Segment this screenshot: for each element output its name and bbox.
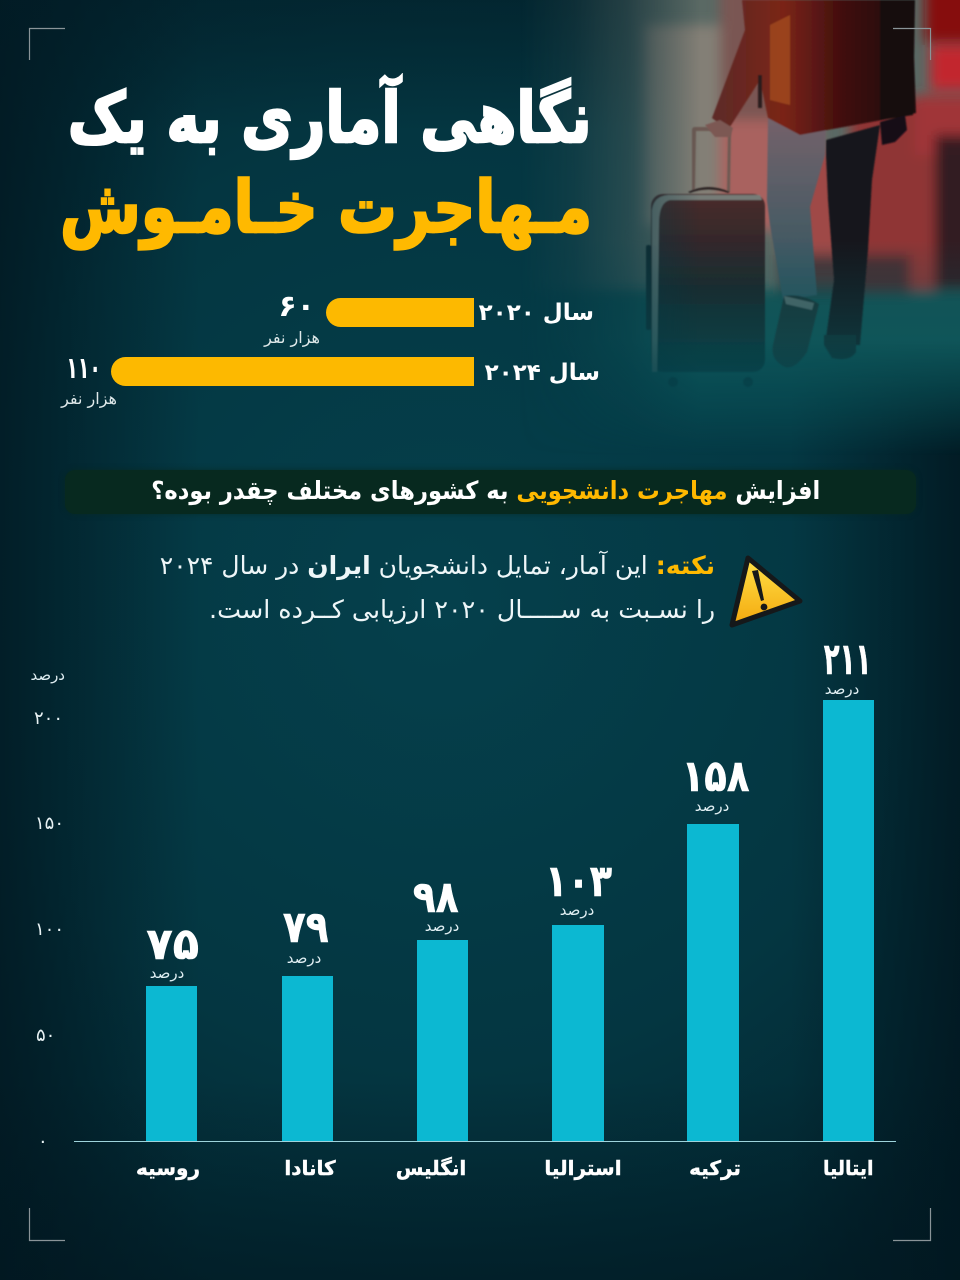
note line 1: نکته: این آمار، تمایل دانشجویان ایران در سال ۲۰۲۴ — [160, 551, 715, 580]
y axis ticks: ۱۰۰ — [35, 919, 64, 940]
country: Turkey: ترکیه — [689, 1156, 741, 1180]
y axis ticks: ۵۰ — [36, 1025, 55, 1046]
bar 2024 — [111, 357, 474, 386]
bar: Italy — [823, 700, 874, 1141]
value 60: ۶۰ — [278, 289, 315, 324]
bar: Canada — [282, 976, 333, 1141]
note line 2: را نسـبت به ســـــال ۲۰۲۰ ارزیابی کــرده است. — [209, 595, 715, 624]
label 2024: سال ۲۰۲۴ — [485, 360, 600, 386]
unit: درصد — [287, 949, 321, 967]
y axis ticks: ۱۵۰ — [35, 813, 64, 834]
unit: درصد — [150, 964, 184, 982]
value 98: ۹۸ — [413, 872, 459, 923]
unit 110: هزار نفر — [61, 389, 117, 408]
axis line — [74, 1141, 896, 1142]
bar chart — [30, 634, 896, 1180]
y axis ticks: ۰ — [38, 1131, 48, 1152]
country: UK: انگلیس — [396, 1156, 466, 1180]
icon: warning triangle — [730, 556, 802, 628]
bar 2020 — [326, 298, 474, 327]
label 2020: سال ۲۰۲۰ — [479, 300, 594, 326]
unit: درصد — [425, 917, 459, 935]
value 158: ۱۵۸ — [682, 751, 750, 802]
suitcase — [646, 127, 765, 387]
country: Russia: روسیه — [136, 1156, 200, 1180]
title: نگاهی آماری به یک — [68, 77, 592, 159]
bar: Russia — [146, 986, 197, 1141]
bar: UK — [417, 940, 468, 1141]
y axis ticks: ۲۰۰ — [34, 708, 63, 729]
y axis unit: درصد — [30, 666, 65, 684]
year comparison bars — [60, 289, 600, 408]
bar: Turkey — [687, 824, 739, 1141]
banner text: افزایش مهاجرت دانشجویی به کشورهای مختلف چقدر بوده؟ — [151, 476, 820, 505]
question banner — [65, 470, 916, 514]
traveler silhouette — [705, 0, 916, 367]
unit: درصد — [560, 901, 594, 919]
value 79: ۷۹ — [283, 902, 329, 953]
country: Italy: ایتالیا — [823, 1156, 873, 1180]
value 75: ۷۵ — [147, 919, 199, 970]
value 103: ۱۰۳ — [546, 856, 612, 907]
country: Australia: استرالیا — [544, 1156, 622, 1180]
unit: درصد — [695, 797, 729, 815]
value 211: ۲۱۱ — [824, 634, 872, 685]
bar: Australia — [552, 925, 604, 1141]
title highlight: مـهاجرت خـامـوش — [60, 165, 592, 249]
value 110: ۱۱۰ — [66, 351, 101, 386]
unit 60: هزار نفر — [264, 328, 320, 347]
country: Canada: کانادا — [284, 1156, 336, 1180]
note text — [160, 550, 715, 624]
unit: درصد — [825, 680, 859, 698]
y axis ticks — [34, 708, 64, 1152]
